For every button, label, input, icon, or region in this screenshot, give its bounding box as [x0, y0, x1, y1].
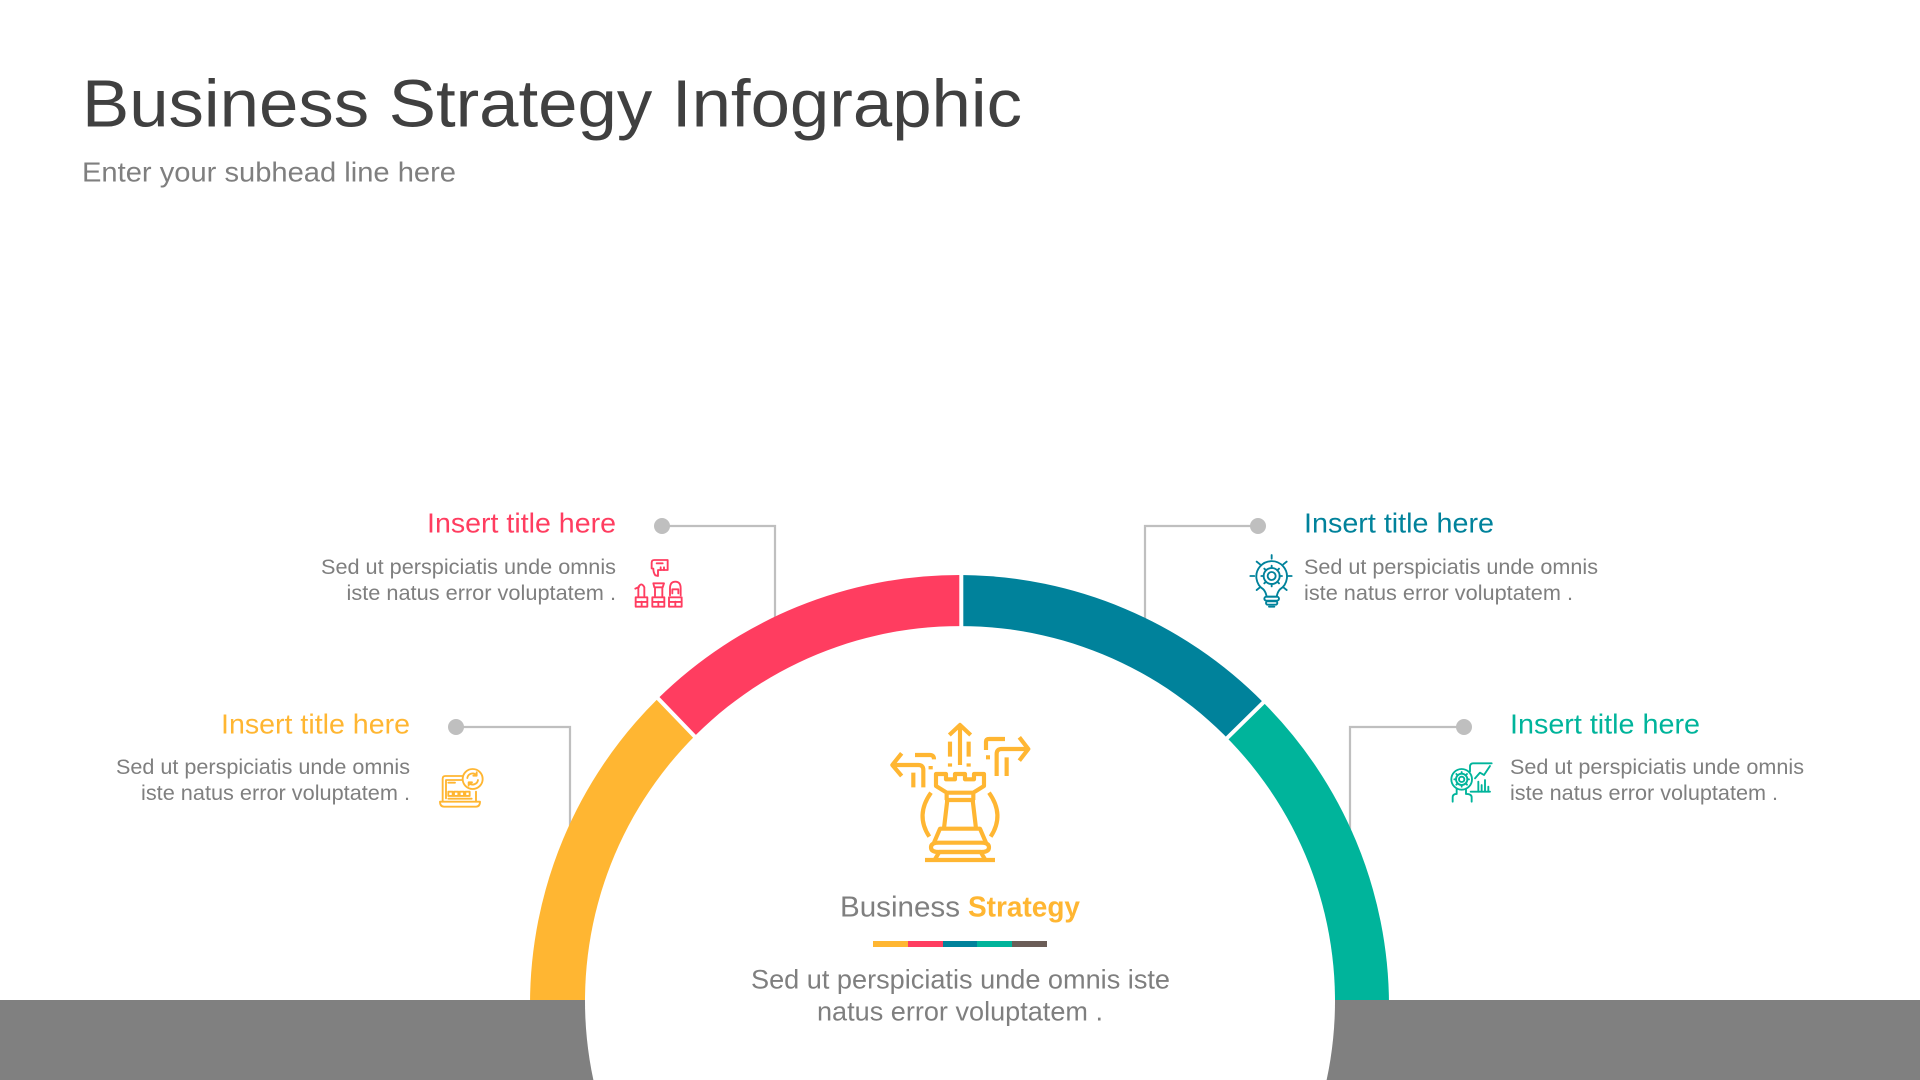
description: [321, 555, 616, 605]
center description: natus error voluptatem .: [817, 996, 1103, 1026]
subtitle: Enter your subhead line here: [82, 156, 456, 188]
center heading: [840, 892, 1080, 924]
description: [1304, 555, 1598, 605]
icon: laptop refresh: [440, 769, 483, 807]
icon: head gear chart: [1451, 763, 1492, 802]
panel: red item: [321, 508, 682, 607]
center heading: Business: [840, 892, 960, 924]
heading: Insert title here: [427, 508, 616, 538]
icon: lightbulb gear: [1250, 555, 1292, 607]
panel: green item: [1451, 708, 1804, 805]
description: Sed ut perspiciatis unde omnis: [321, 555, 616, 579]
heading: Insert title here: [1510, 708, 1700, 740]
panel: connector lines: [448, 518, 1472, 830]
heading: Insert title here: [1304, 508, 1494, 538]
segment: green: [960, 702, 1389, 1005]
panel: yellow item: [116, 708, 483, 807]
description: iste natus error voluptatem .: [141, 781, 410, 805]
ground band: [0, 1000, 1920, 1080]
panel: teal item: [1250, 508, 1598, 607]
segment: teal: [960, 575, 1263, 1005]
description: Sed ut perspiciatis unde omnis: [1304, 555, 1598, 579]
center description: Sed ut perspiciatis unde omnis iste: [751, 964, 1170, 994]
color divider bar: [873, 941, 1047, 947]
heading: Insert title here: [221, 708, 410, 740]
segment: yellow: [530, 698, 960, 1005]
icon: team: [635, 560, 682, 607]
description: [116, 755, 410, 805]
description: iste natus error voluptatem .: [1510, 781, 1778, 805]
description: iste natus error voluptatem .: [1304, 581, 1573, 605]
description: [1510, 755, 1804, 805]
segment: red: [658, 575, 961, 1005]
center heading: Strategy: [968, 892, 1080, 924]
semicircle ring chart: [530, 565, 1389, 1005]
description: iste natus error voluptatem .: [346, 581, 616, 605]
description: Sed ut perspiciatis unde omnis: [116, 755, 410, 779]
center description: [751, 964, 1170, 1026]
title: Business Strategy Infographic: [82, 66, 1022, 142]
icon: chess rook with arrows: [892, 725, 1028, 860]
description: Sed ut perspiciatis unde omnis: [1510, 755, 1804, 779]
center white disk: [585, 626, 1335, 1080]
